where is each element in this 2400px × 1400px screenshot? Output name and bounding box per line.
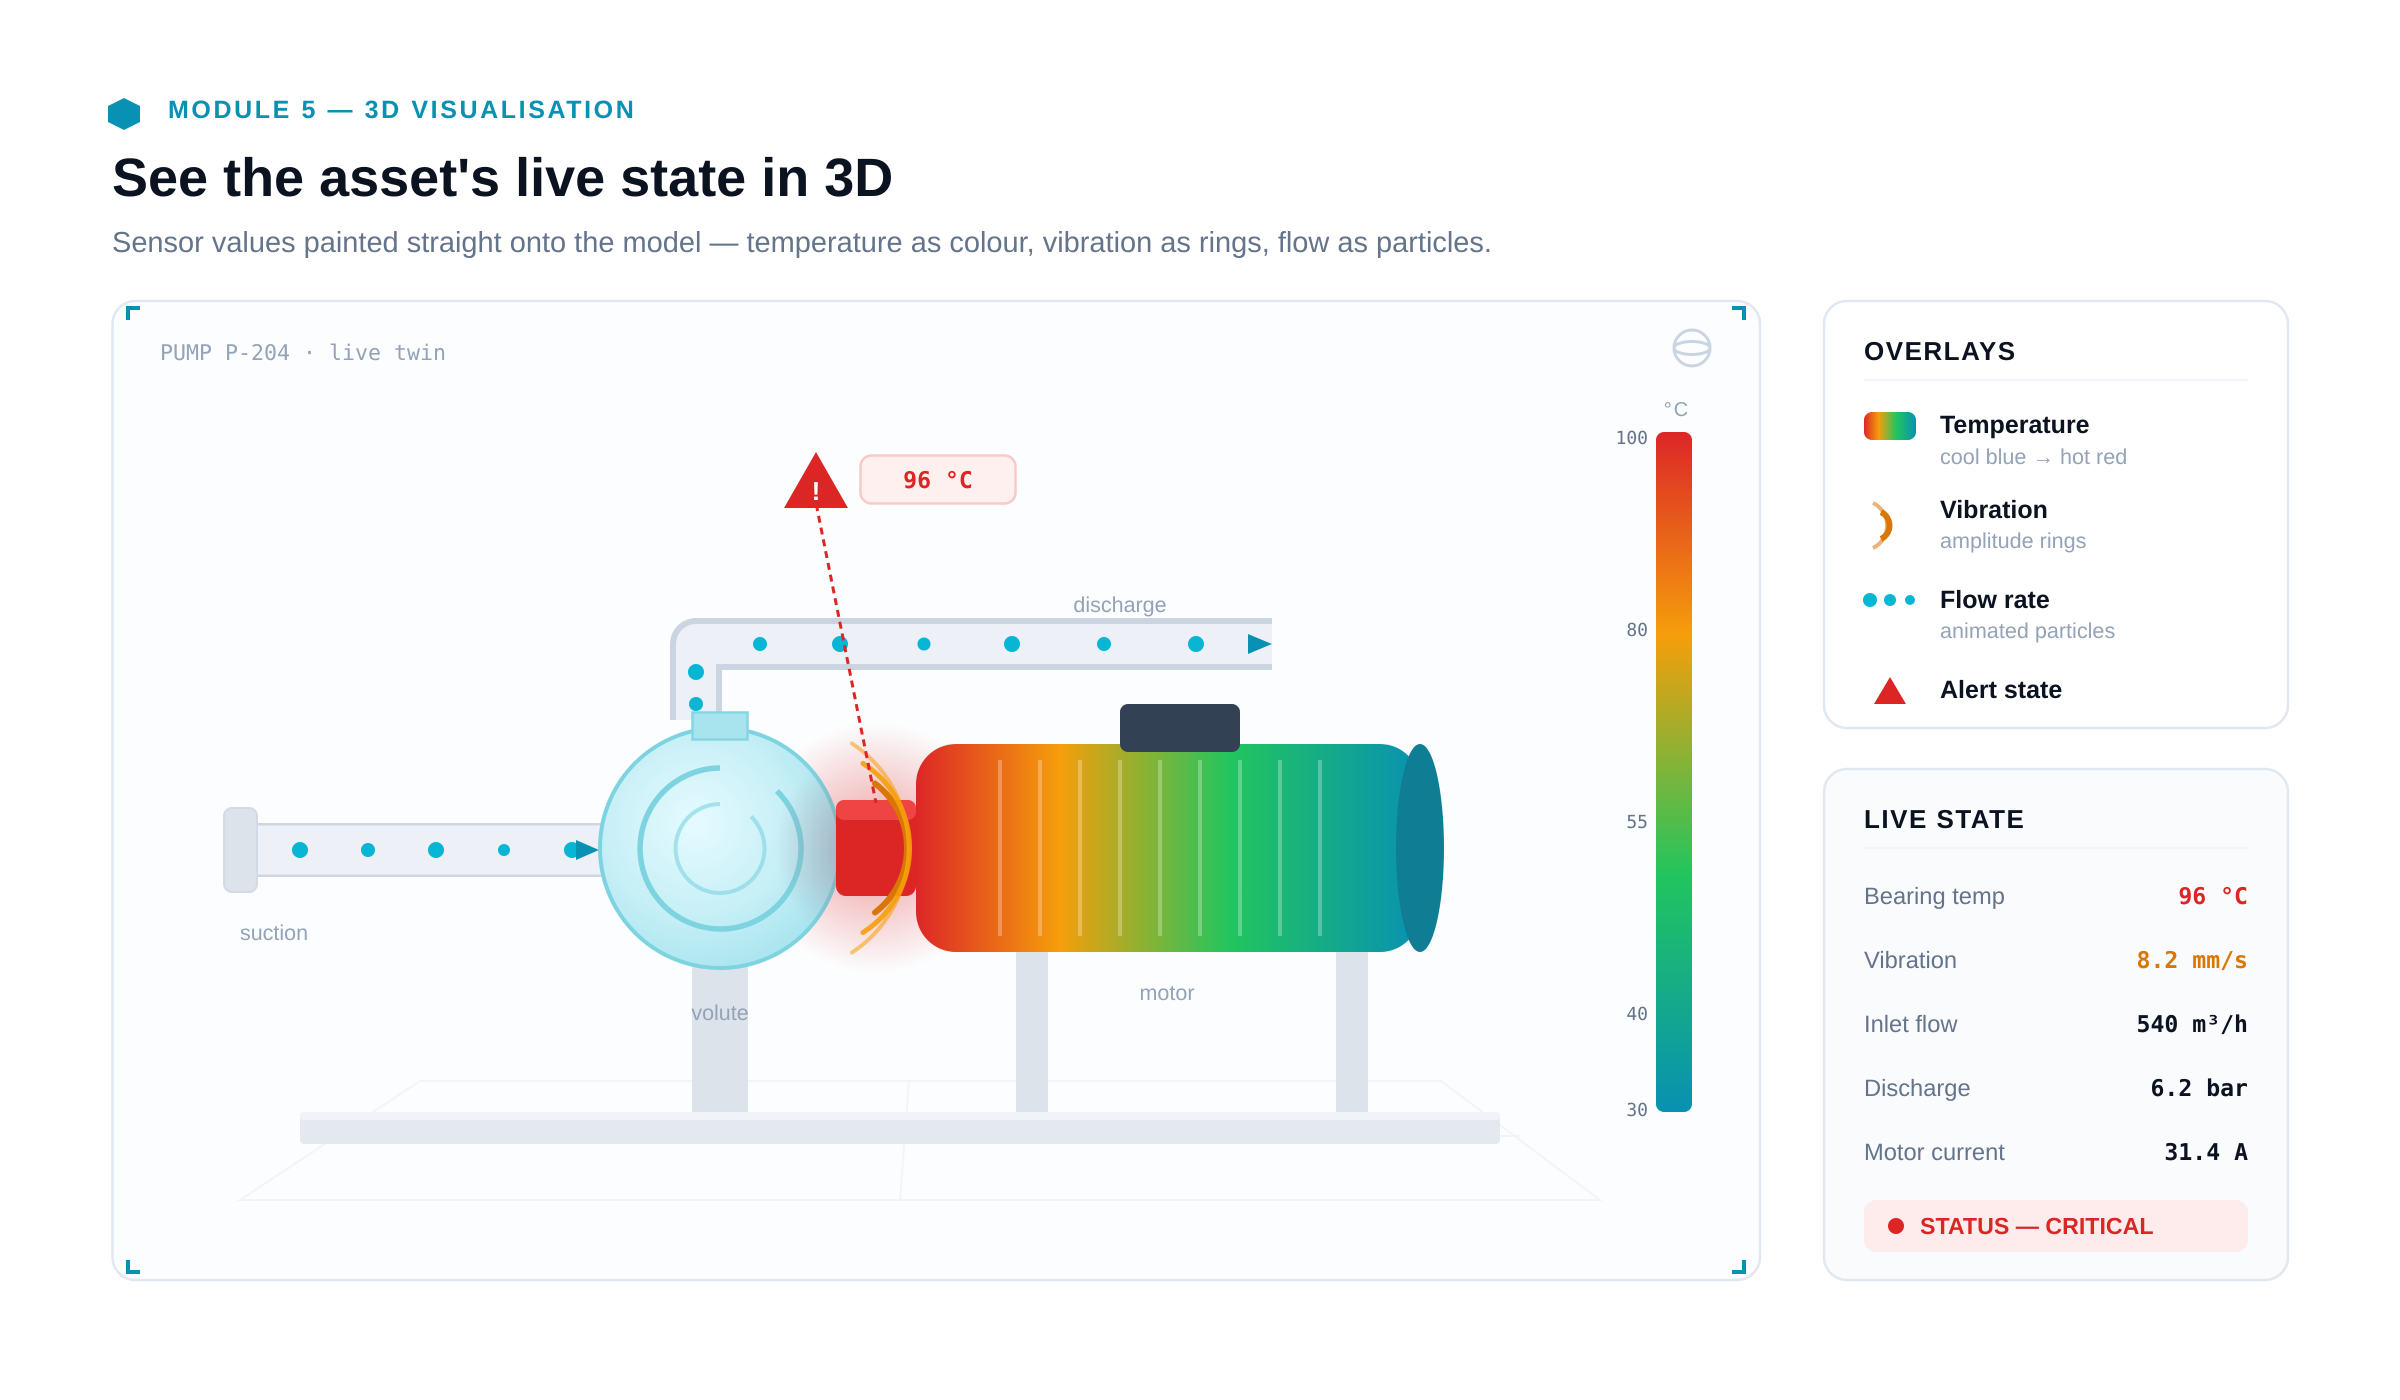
legend: temperature [1864, 411, 2127, 469]
flow particles: discharge [688, 636, 1204, 711]
volute spirals [640, 768, 801, 929]
row: bearing temp [1864, 884, 2248, 910]
flow arrow: suction [576, 840, 599, 860]
row: motor current: 31.4 A [2164, 1140, 2248, 1166]
row: motor current [1864, 1140, 2248, 1166]
volute hot-side shading [785, 780, 836, 916]
ticks: 30 [1626, 1100, 1648, 1121]
legend: flow rate: animated particles [1940, 618, 2115, 643]
icon: module hexagon [108, 98, 140, 130]
title: See the asset's live state in 3D [112, 148, 893, 208]
label: volute: volute [691, 1001, 749, 1025]
legend: vibration: amplitude rings [1940, 528, 2087, 553]
supports [692, 900, 1368, 1112]
legend: temperature: cool blue → hot red [1940, 444, 2127, 469]
vibration rings [852, 744, 910, 952]
legend: alert state [1874, 676, 2062, 704]
row: motor current: Motor current [1864, 1140, 2005, 1166]
coupling [836, 800, 916, 896]
row: inlet flow: Inlet flow [1864, 1012, 1958, 1038]
legend: vibration: Vibration [1940, 496, 2048, 524]
alert triangle: ! [812, 476, 820, 506]
legend: temperature: Temperature [1940, 411, 2090, 439]
motor end cap [1396, 744, 1444, 952]
label: motor: motor [1140, 981, 1194, 1005]
row: inlet flow: 540 m³/h [2137, 1012, 2248, 1038]
row: vibration: Vibration [1864, 948, 1957, 974]
ticks: 100 [1615, 428, 1648, 449]
ticks [1615, 428, 1648, 1121]
temperature scale [1615, 399, 1692, 1121]
ticks: 40 [1626, 1004, 1648, 1025]
panel: 3D twin viewport [112, 301, 1760, 1280]
suction flange [224, 808, 257, 892]
corner brackets [128, 308, 1744, 1272]
legend: alert state: Alert state [1940, 676, 2062, 704]
row: vibration [1864, 948, 2248, 974]
pump volute [598, 711, 836, 970]
icon: orbit globe [1674, 330, 1710, 366]
volute outlet nozzle [692, 712, 748, 740]
row: discharge [1864, 1076, 2248, 1102]
discharge pipe [670, 618, 1272, 720]
label: suction: suction [240, 921, 308, 945]
row: inlet flow [1864, 1012, 2248, 1038]
status badge: STATUS — CRITICAL [1920, 1213, 2154, 1239]
heading: live state: LIVE STATE [1864, 804, 2025, 834]
unit: °C [1664, 399, 1690, 421]
row: vibration: 8.2 mm/s [2137, 948, 2248, 974]
row: bearing temp: 96 °C [2178, 884, 2248, 910]
ticks: 55 [1626, 812, 1648, 833]
panel: live state [1824, 769, 2288, 1280]
motor [916, 704, 1444, 952]
legend: flow rate [1863, 586, 2115, 643]
row: discharge: Discharge [1864, 1076, 1971, 1102]
status badge [1864, 1200, 2248, 1252]
motor cooling fins [998, 760, 1322, 936]
flow particles: suction [292, 842, 580, 858]
legend: vibration [1873, 496, 2087, 553]
legend: flow rate: Flow rate [1940, 586, 2050, 614]
temperature callout: 96 °C [903, 468, 973, 494]
flow arrow: discharge [1248, 634, 1272, 654]
terminal box [1120, 704, 1240, 752]
label: discharge: discharge [1073, 593, 1167, 617]
eyebrow: module label: MODULE 5 — 3D VISUALISATION [168, 96, 636, 124]
row: bearing temp: Bearing temp [1864, 884, 2005, 910]
suction pipe [224, 808, 610, 892]
floor grid [240, 1081, 1600, 1200]
leader line to hot-spot [817, 508, 876, 803]
panel: overlays legend [1824, 301, 2288, 728]
ticks: 80 [1626, 620, 1648, 641]
heading: overlays: OVERLAYS [1864, 336, 2017, 366]
base plate [300, 1112, 1500, 1144]
colour bar [1656, 432, 1692, 1112]
alert triangle [784, 452, 848, 508]
hot-spot glow [751, 723, 1001, 973]
subtitle: Sensor values painted straight onto the model — temperature as colour, vibration as rings, flow as particles. [112, 227, 1492, 259]
viewport label: PUMP P-204 · live twin [160, 341, 446, 366]
row: discharge: 6.2 bar [2150, 1076, 2248, 1102]
temperature callout [860, 456, 1016, 504]
